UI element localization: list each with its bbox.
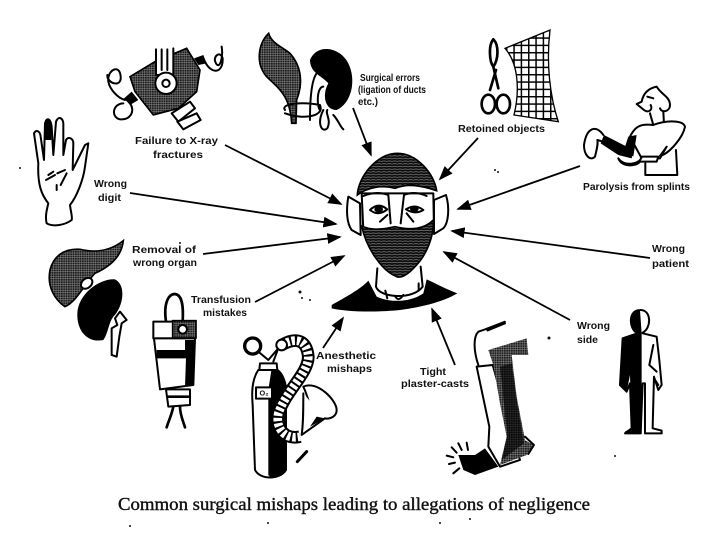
icon: scissors and gauze <box>482 30 558 122</box>
label: surgical errors line 3: etc.) <box>358 96 378 108</box>
valve <box>259 363 277 370</box>
icon: hand with marked digit <box>34 118 88 225</box>
label: retained objects: Retoined objects <box>458 123 545 135</box>
torso <box>630 121 685 158</box>
label: X-ray line 2: fractures <box>153 149 203 161</box>
arrow: wrong patient <box>452 231 650 258</box>
arrow: paralysis <box>458 166 580 209</box>
arrows <box>130 108 650 365</box>
kidney <box>310 49 352 110</box>
central figure: masked surgeon <box>332 153 457 312</box>
surgical mask <box>362 220 433 277</box>
icon: liver and kidney <box>49 241 127 357</box>
face <box>362 193 434 230</box>
splint <box>601 135 637 158</box>
gas cylinder <box>252 368 286 477</box>
icon: half-shaded human figure <box>620 310 662 434</box>
labels <box>94 72 690 390</box>
arrow: X-ray <box>225 145 341 204</box>
icon: transfusion bag <box>153 294 196 427</box>
label: transfusion: Transfusion <box>191 294 251 306</box>
icon: leg in plaster cast <box>447 321 534 475</box>
label: wrong side: Wrong <box>577 320 610 332</box>
surgical cap <box>357 153 437 195</box>
icon: anesthetic cylinder and mask: O₂ <box>260 388 268 397</box>
label: wrong digit: Wrong <box>94 178 127 190</box>
arrow: wrong side <box>444 252 570 320</box>
shoulders <box>332 279 457 312</box>
label: wrong organ line 2: wrong organ <box>132 257 197 269</box>
icon: surgical errors organs <box>259 33 352 130</box>
label: anesthetic: Anesthetic <box>316 350 376 362</box>
lung <box>259 33 301 123</box>
arrow: wrong organ <box>203 237 340 254</box>
clamp <box>490 39 498 90</box>
icon: X-ray machine <box>107 47 223 129</box>
label: anesthetic line 2: mishaps <box>327 363 372 375</box>
label: paralysis: Parolysis from splints <box>583 181 690 193</box>
arrow: retained objects <box>440 138 478 179</box>
face mask <box>303 385 337 419</box>
arrow: anesthetic <box>323 318 343 348</box>
label: surgical errors: Surgical errors <box>360 72 420 84</box>
label: wrong organ: Removal of <box>132 244 197 256</box>
icon: anesthetic cylinder and mask <box>245 338 337 477</box>
arrow: surgical errors <box>353 108 371 155</box>
ears <box>347 197 361 235</box>
breathing tube <box>278 341 308 437</box>
label: plaster casts line 2: plaster-casts <box>401 378 469 390</box>
scan specks <box>19 167 616 527</box>
label: wrong patient: Wrong <box>652 243 685 255</box>
arrow: transfusion <box>255 256 344 302</box>
label: wrong patient line 2: patient <box>652 258 690 270</box>
vessels and ligature <box>284 73 343 130</box>
caption: Common surgical mishaps leading to allegations of negligence <box>118 494 590 514</box>
label: wrong side line 2: side <box>577 334 598 346</box>
label: X-ray: Failure to X-ray <box>135 135 218 147</box>
arrow: wrong digit <box>130 193 336 224</box>
label: transfusion line 2: mistakes <box>203 307 247 319</box>
arrow: plaster casts <box>432 309 455 365</box>
neck <box>376 267 423 296</box>
eyes and nose <box>363 193 427 223</box>
label: plaster casts: Tight <box>420 366 447 378</box>
label: wrong digit line 2: digit <box>98 192 122 204</box>
hand <box>584 129 603 158</box>
gauze net <box>505 30 558 122</box>
icon: man with arm splint <box>584 87 685 175</box>
label: surgical errors line 2: (ligation of ducts <box>358 84 426 96</box>
